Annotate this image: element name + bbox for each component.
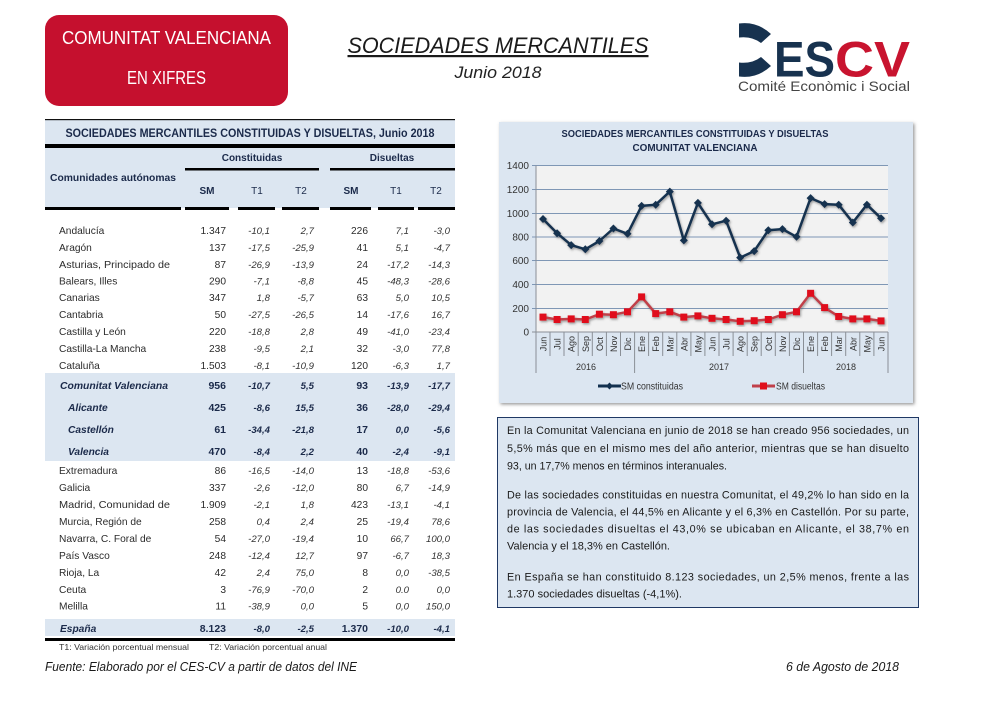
legend: SM disueltas — [752, 382, 825, 392]
badge: Comunitat Valenciana en xifres: COMUNITAT VALENCIANA — [62, 28, 271, 48]
table rows: regions: -2,6 — [253, 483, 271, 494]
x axis month labels: Nov — [609, 336, 619, 352]
table rows: regions: 347 — [209, 293, 226, 304]
x axis month labels: Ene — [637, 336, 647, 352]
table rows: regions: -18,8 — [387, 466, 410, 477]
table rows: highlighted Comunitat Valenciana: Comunitat Valenciana — [60, 381, 168, 392]
table rows: regions: 41 — [357, 243, 368, 254]
table rows: highlighted Comunitat Valenciana: -2,4 — [392, 447, 410, 458]
table row: España total: 1.370 — [342, 623, 368, 635]
table rows: regions: 0,0 — [437, 585, 451, 596]
table column headers: Constituidas — [222, 153, 283, 164]
title — [348, 33, 649, 82]
paragraph 2: de las sociedades disueltas el 43,0% se ubicaban en Alicante, el 38,7% en — [507, 524, 909, 536]
table rows: regions: Andalucía — [59, 226, 105, 237]
x axis ticks — [532, 166, 888, 373]
x axis month labels: Jun — [708, 337, 718, 351]
table rows: regions: 2,4 — [300, 517, 314, 528]
table rows: regions: 0.0 — [396, 585, 410, 596]
table rows: regions: 2 — [362, 585, 368, 596]
table rows: regions: 137 — [209, 243, 226, 254]
source note: Fuente: Elaborado por el CES-CV a partir de datos del INE — [45, 660, 358, 674]
table rows: regions: 226 — [351, 226, 368, 237]
logo: CESCV: CV — [835, 32, 911, 88]
table rows: regions: Murcia, Región de — [59, 517, 142, 528]
table rows: regions: 0,0 — [396, 602, 410, 612]
y axis labels: 800 — [512, 232, 529, 244]
table row: España total: -10,0 — [387, 624, 410, 635]
x axis year labels: 2017 — [709, 362, 729, 372]
table rows: regions: 5,1 — [396, 243, 409, 254]
table rows: regions: -27,0 — [248, 534, 271, 545]
legend: SM disueltas: SM disueltas — [776, 382, 825, 392]
table rows: regions: 238 — [209, 344, 226, 355]
table rows: regions: 2,8 — [300, 327, 315, 338]
table rows: highlighted Comunitat Valenciana: -17,7 — [428, 381, 451, 392]
table rows: regions: País Vasco — [59, 551, 110, 562]
table title: SOCIEDADES MERCANTILES CONSTITUIDAS Y DISUELTAS, Junio 2018 — [66, 128, 435, 140]
table rows: regions: -18,8 — [248, 327, 271, 338]
table rows: regions: -4,7 — [433, 243, 451, 254]
table rows: regions: -26,9 — [248, 260, 271, 271]
table rows: regions: -14,0 — [292, 466, 315, 477]
table column headers — [50, 153, 442, 197]
paragraph 1: En la Comunitat Valenciana en junio de 2018 se han creado 956 sociedades, un — [507, 425, 909, 437]
x axis year labels: 2018 — [836, 362, 856, 372]
table rows: regions: 8 — [362, 568, 368, 579]
series: SM disueltas — [543, 293, 881, 321]
table rows: regions: 5,0 — [396, 293, 410, 304]
table rows: highlighted Comunitat Valenciana: Alicante — [67, 403, 108, 414]
table rows: regions: -17,2 — [387, 260, 410, 271]
table rows: regions: -70,0 — [292, 585, 315, 596]
table rows: regions: -19,4 — [292, 534, 314, 545]
table rows: regions: 337 — [209, 483, 226, 494]
table rows: regions: 1.909 — [200, 500, 226, 511]
table rows: highlighted Comunitat Valenciana: -9,1 — [433, 447, 450, 458]
table rows: regions: 25 — [357, 517, 368, 528]
paragraph 2: provincia de Valencia, el 44,5% en Alicante y el 6,3% en Castellón. Por su parte, — [507, 506, 909, 518]
table rows: highlighted Comunitat Valenciana: 61 — [214, 424, 226, 436]
table rows: highlighted Comunitat Valenciana: -34,4 — [248, 425, 271, 436]
table rows: regions: -28,6 — [428, 276, 451, 288]
x axis month labels: Jun — [876, 337, 886, 351]
series: SM constituidas — [543, 192, 881, 258]
table rows: regions: -48,3 — [387, 276, 410, 288]
table rows: highlighted Comunitat Valenciana: Valencia — [68, 447, 109, 458]
table rows: regions: Melilla — [59, 602, 88, 612]
table column headers: T1 — [390, 186, 402, 197]
table rows: regions: 50 — [215, 310, 226, 321]
table rows: regions: -6,3 — [392, 361, 410, 372]
table rows: highlighted Comunitat Valenciana: 5,5 — [301, 381, 315, 392]
table row: España total: 8.123 — [200, 623, 226, 635]
table rows: highlighted Comunitat Valenciana: 2,2 — [300, 447, 315, 458]
table rows: highlighted Comunitat Valenciana: -8,6 — [253, 403, 271, 414]
table rows: regions: 13 — [357, 466, 368, 477]
table rows: regions: 120 — [351, 361, 368, 372]
y axis labels: 200 — [512, 304, 529, 315]
table rows: highlighted Comunitat Valenciana: 956 — [208, 380, 226, 392]
table column headers: SM — [200, 186, 214, 197]
y axis labels: 400 — [512, 280, 529, 291]
table rows: regions: Madrid, Comunidad de — [59, 500, 170, 511]
table rows: regions: 42 — [215, 568, 226, 579]
table rows: regions: 86 — [215, 466, 226, 477]
paragraph 2: Valencia y el 18,3% en Castellón. — [507, 540, 670, 552]
table rows: regions: Galicia — [59, 483, 90, 494]
table rows: regions: -13,9 — [292, 260, 315, 271]
table row: España total — [60, 623, 450, 635]
table rows: regions: 49 — [357, 327, 368, 338]
table rows: regions: 1,8 — [257, 293, 271, 304]
table rows: regions: -27,5 — [248, 310, 271, 321]
table rows: regions: 10 — [357, 534, 368, 545]
table row: España total: -4,1 — [433, 624, 450, 635]
x axis year labels: 2016 — [576, 362, 596, 372]
table rows: regions: 1.503 — [200, 361, 226, 372]
x axis month labels: Feb — [820, 336, 830, 352]
table column headers: T1 — [251, 186, 263, 197]
table rows: highlighted Comunitat Valenciana: -29,4 — [428, 403, 451, 414]
table rows: regions: 2,4 — [256, 568, 270, 579]
table column headers: SM — [344, 186, 358, 197]
x axis month labels: Oct — [764, 337, 774, 351]
table rows: regions: -8,8 — [297, 276, 315, 288]
table rows: regions: 5 — [362, 602, 368, 612]
table rows: regions: Castilla y León — [59, 327, 126, 338]
table rows: regions: -38,9 — [248, 602, 271, 612]
chart title: SOCIEDADES MERCANTILES CONSTITUIDAS Y DISUELTAS — [562, 129, 829, 140]
paragraph 3: 1.370 sociedades disueltas (-4,1%). — [507, 588, 682, 600]
table column headers: Comunidades autónomas — [50, 173, 176, 184]
table footnote — [59, 642, 327, 652]
table rows: regions: -41,0 — [387, 327, 410, 338]
y axis labels: 1400 — [507, 161, 529, 172]
table rows: regions: Canarias — [59, 293, 100, 304]
table rows: highlighted Comunitat Valenciana: 425 — [208, 402, 226, 414]
table rows: regions: 2,1 — [300, 344, 314, 355]
table rows: highlighted Comunitat Valenciana — [60, 380, 451, 458]
table rows: regions: Cantabria — [59, 310, 104, 321]
table rows: regions: 290 — [209, 276, 226, 288]
table rows: regions: -3,0 — [392, 344, 410, 355]
table rows: regions: Asturias, Principado de — [59, 260, 170, 271]
table rows: regions: 80 — [357, 483, 368, 494]
table rows: highlighted Comunitat Valenciana: 17 — [356, 424, 368, 436]
x axis month labels — [538, 335, 886, 353]
table rows: highlighted Comunitat Valenciana: -8,4 — [253, 447, 271, 458]
table rows: regions: 63 — [357, 293, 368, 304]
x axis month labels: Oct — [595, 337, 605, 351]
table rows: regions: 0,0 — [396, 568, 410, 579]
x axis month labels: Jul — [722, 338, 732, 350]
table rows: regions — [59, 226, 451, 612]
x axis month labels: Abr — [679, 337, 689, 351]
table rows: regions: 77,8 — [431, 344, 451, 355]
title: SOCIEDADES MERCANTILES — [348, 33, 649, 58]
table rows: regions: -10,1 — [248, 226, 270, 237]
x axis month labels: Ago — [567, 336, 577, 352]
table rows: regions: -8,1 — [253, 361, 270, 372]
table rows: regions: -4,1 — [433, 500, 450, 511]
table rows: highlighted Comunitat Valenciana: -21,8 — [292, 425, 315, 436]
table rows: regions: Cataluña — [59, 361, 100, 372]
table rows: regions: Rioja, La — [59, 568, 100, 579]
table rows: regions: 12,7 — [295, 551, 315, 562]
table rows: highlighted Comunitat Valenciana: -13,9 — [387, 381, 410, 392]
x axis month labels: Feb — [651, 336, 661, 352]
table rows: highlighted Comunitat Valenciana: -10,7 — [248, 381, 271, 392]
paragraph 1 — [507, 425, 909, 472]
table rows: highlighted Comunitat Valenciana: -28,0 — [387, 403, 410, 414]
table rows: regions: 220 — [209, 327, 226, 338]
table rows: highlighted Comunitat Valenciana: 93 — [356, 380, 368, 392]
table rows: regions: 1.347 — [200, 226, 226, 237]
y axis labels: 1200 — [507, 185, 529, 196]
table: sociedades mercantiles por comunidad — [45, 119, 455, 652]
table rows: regions: 2,7 — [300, 226, 315, 237]
x axis month labels: Ene — [806, 336, 816, 352]
date: 6 de Agosto de 2018 — [786, 660, 899, 674]
table rows: regions: 423 — [351, 500, 368, 511]
table rows: regions: -2,1 — [253, 500, 270, 511]
x axis month labels: Nov — [778, 336, 788, 352]
table footnote: T1: Variación porcentual mensual — [59, 642, 189, 652]
chart title: COMUNITAT VALENCIANA — [632, 143, 758, 154]
table rows: regions: -17,5 — [248, 243, 271, 254]
panel: line chart — [499, 122, 913, 403]
table rows: regions: -26,5 — [292, 310, 315, 321]
paragraph 3 — [507, 572, 910, 600]
table rows: regions: 1,7 — [437, 361, 451, 372]
table rows: regions: Balears, Illes — [59, 276, 117, 288]
table rows: highlighted Comunitat Valenciana: 36 — [356, 402, 368, 414]
y axis labels — [507, 161, 529, 338]
x axis month labels: Sep — [750, 336, 760, 352]
paragraph 2: De las sociedades constituidas en nuestra Comunitat, el 49,2% lo han sido en la — [507, 490, 909, 502]
table rows: regions: 7,1 — [396, 226, 409, 237]
table rows: regions: -13,1 — [387, 500, 409, 511]
x axis month labels: Mar — [665, 336, 675, 352]
paragraph 3: En España se han constituido 8.123 sociedades, un 2,5% menos, frente a las — [507, 572, 910, 584]
table column headers: T2 — [430, 186, 442, 197]
table rows: regions: 24 — [357, 260, 368, 271]
legend: SM constituidas: SM constituidas — [621, 382, 683, 392]
table rows: regions: -5,7 — [297, 293, 315, 304]
table rows: regions: 150,0 — [426, 602, 451, 612]
table rows: highlighted Comunitat Valenciana: -5,6 — [433, 425, 451, 436]
y axis labels: 1000 — [507, 209, 529, 220]
table rows: regions: -16,5 — [248, 466, 271, 477]
table rows: regions: 10,5 — [431, 293, 451, 304]
table rows: regions: 248 — [209, 551, 226, 562]
table rows: regions: 16,7 — [431, 310, 451, 321]
table rows: regions: -12,4 — [248, 551, 270, 562]
table rows: regions: -12,0 — [292, 483, 315, 494]
table rows: regions: Aragón — [59, 243, 92, 254]
y axis labels: 0 — [523, 328, 529, 338]
table rows: regions: 87 — [215, 260, 226, 271]
table rows: regions: 54 — [215, 534, 226, 545]
table rows: regions: 6,7 — [396, 483, 410, 494]
table rows: regions: -6,7 — [392, 551, 410, 562]
table rows: regions: 32 — [357, 344, 368, 355]
table rows: regions: 18,3 — [431, 551, 451, 562]
table rows: regions: -14,3 — [428, 260, 451, 271]
table row: España total: -2,5 — [297, 624, 315, 635]
y axis labels: 600 — [512, 256, 529, 267]
table row: España total: -8,0 — [253, 624, 271, 635]
table rows: regions: -10,9 — [292, 361, 315, 372]
table column headers: T2 — [295, 186, 307, 197]
table rows: regions: Ceuta — [59, 585, 87, 596]
table rows: regions: -9,5 — [253, 344, 271, 355]
table rows: highlighted Comunitat Valenciana: 470 — [208, 446, 226, 458]
table rows: regions: -38,5 — [428, 568, 451, 579]
table rows: regions: 258 — [209, 517, 226, 528]
x axis month labels: Mar — [834, 336, 844, 352]
table rows: regions: Castilla-La Mancha — [59, 344, 147, 355]
table row: España total: España — [60, 624, 97, 635]
table rows: regions: 3 — [220, 585, 226, 596]
x axis month labels: Ago — [736, 336, 746, 352]
table rows: regions: Navarra, C. Foral de — [59, 534, 152, 545]
table rows: regions: -14,9 — [428, 483, 451, 494]
table rows: regions: -3,0 — [433, 226, 451, 237]
x axis year labels — [576, 362, 856, 372]
logo: CESCV: Comité Econòmic i Social — [738, 78, 910, 94]
x axis month labels: May — [693, 335, 703, 353]
table rows: regions: -23,4 — [428, 327, 450, 338]
paragraph 1: 93, un 17,7% menos en términos interanuales. — [507, 460, 727, 472]
chart title — [562, 129, 829, 154]
x axis month labels: Jul — [553, 338, 563, 350]
table rows: regions: 1,8 — [301, 500, 315, 511]
paragraph 2 — [507, 490, 909, 552]
table rows: regions: 78,6 — [431, 517, 451, 528]
x axis month labels: Dic — [623, 337, 633, 350]
table rows: regions: 100,0 — [426, 534, 451, 545]
panel: commentary text — [498, 418, 918, 608]
table rows: regions: -7,1 — [253, 276, 270, 288]
table rows: highlighted Comunitat Valenciana: 0,0 — [396, 425, 410, 436]
table rows: regions: 97 — [357, 551, 368, 562]
badge: Comunitat Valenciana en xifres — [45, 15, 288, 106]
table rows: regions: 75,0 — [295, 568, 315, 579]
table rows: regions: -76,9 — [248, 585, 271, 596]
paragraph 1: 5,5% más que en el mismo mes del año anterior, mientras que se han disuelto — [507, 443, 909, 455]
table rows: regions: -19,4 — [387, 517, 409, 528]
table rows: highlighted Comunitat Valenciana: Castellón — [68, 425, 114, 436]
title: Junio 2018 — [453, 63, 542, 82]
table rows: regions: -25,9 — [292, 243, 315, 254]
table rows: regions: -17,6 — [387, 310, 410, 321]
logo: CESCV: ES — [774, 32, 835, 88]
table footnote: T2: Variación porcentual anual — [209, 642, 327, 652]
table rows: regions: 66,7 — [390, 534, 410, 545]
x axis month labels: Dic — [792, 337, 802, 350]
legend: SM constituidas — [598, 382, 683, 392]
x axis month labels: Abr — [848, 337, 858, 351]
table rows: regions: 45 — [357, 276, 368, 288]
table rows: highlighted Comunitat Valenciana: 15,5 — [295, 403, 315, 414]
table column headers: Disueltas — [370, 153, 415, 164]
x axis month labels: Jun — [538, 337, 548, 351]
x axis month labels: May — [862, 335, 872, 353]
x axis month labels: Sep — [581, 336, 591, 352]
table rows: regions: 14 — [357, 310, 368, 321]
table rows: regions: Extremadura — [59, 466, 118, 477]
logo: CESCV — [738, 23, 911, 94]
table rows: regions: -53,6 — [428, 466, 451, 477]
badge: Comunitat Valenciana en xifres: EN XIFRES — [127, 68, 206, 88]
table rows: highlighted Comunitat Valenciana: 40 — [356, 446, 368, 458]
table rows: regions: 0,4 — [257, 517, 270, 528]
table rows: regions: 0,0 — [301, 602, 315, 612]
table rows: regions: 11 — [215, 602, 226, 612]
